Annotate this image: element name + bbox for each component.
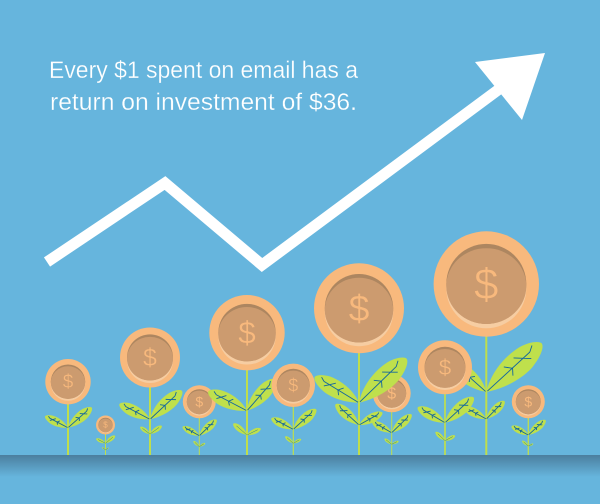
plant 1: $ xyxy=(63,372,74,393)
growth arrow xyxy=(47,53,545,265)
plant 3 xyxy=(117,328,187,455)
plant 6 xyxy=(269,364,320,455)
plant 10: $ xyxy=(439,355,452,380)
plant 7: $ xyxy=(349,287,370,329)
plant 3: $ xyxy=(143,344,157,372)
plant 4: $ xyxy=(195,394,203,410)
headline text xyxy=(49,57,359,116)
plant 9: $ xyxy=(474,260,499,309)
headline text: Every $1 spent on email has a xyxy=(49,57,359,84)
plant 2 xyxy=(95,416,116,455)
plant 8 xyxy=(370,374,415,455)
headline text: return on investment of $36. xyxy=(50,89,357,116)
plant 11 xyxy=(510,385,548,455)
plant 11: $ xyxy=(524,394,532,410)
plant 1 xyxy=(43,359,95,455)
plant 6: $ xyxy=(288,375,298,395)
plant 5 xyxy=(205,295,285,455)
plant 7 xyxy=(310,263,414,455)
plant 10 xyxy=(415,340,478,455)
plant 8: $ xyxy=(387,386,396,403)
ground shadow band xyxy=(0,455,600,477)
plant 2: $ xyxy=(103,421,108,430)
plant 4 xyxy=(181,385,219,455)
plant 9 xyxy=(434,231,550,455)
plant 5: $ xyxy=(238,314,256,350)
